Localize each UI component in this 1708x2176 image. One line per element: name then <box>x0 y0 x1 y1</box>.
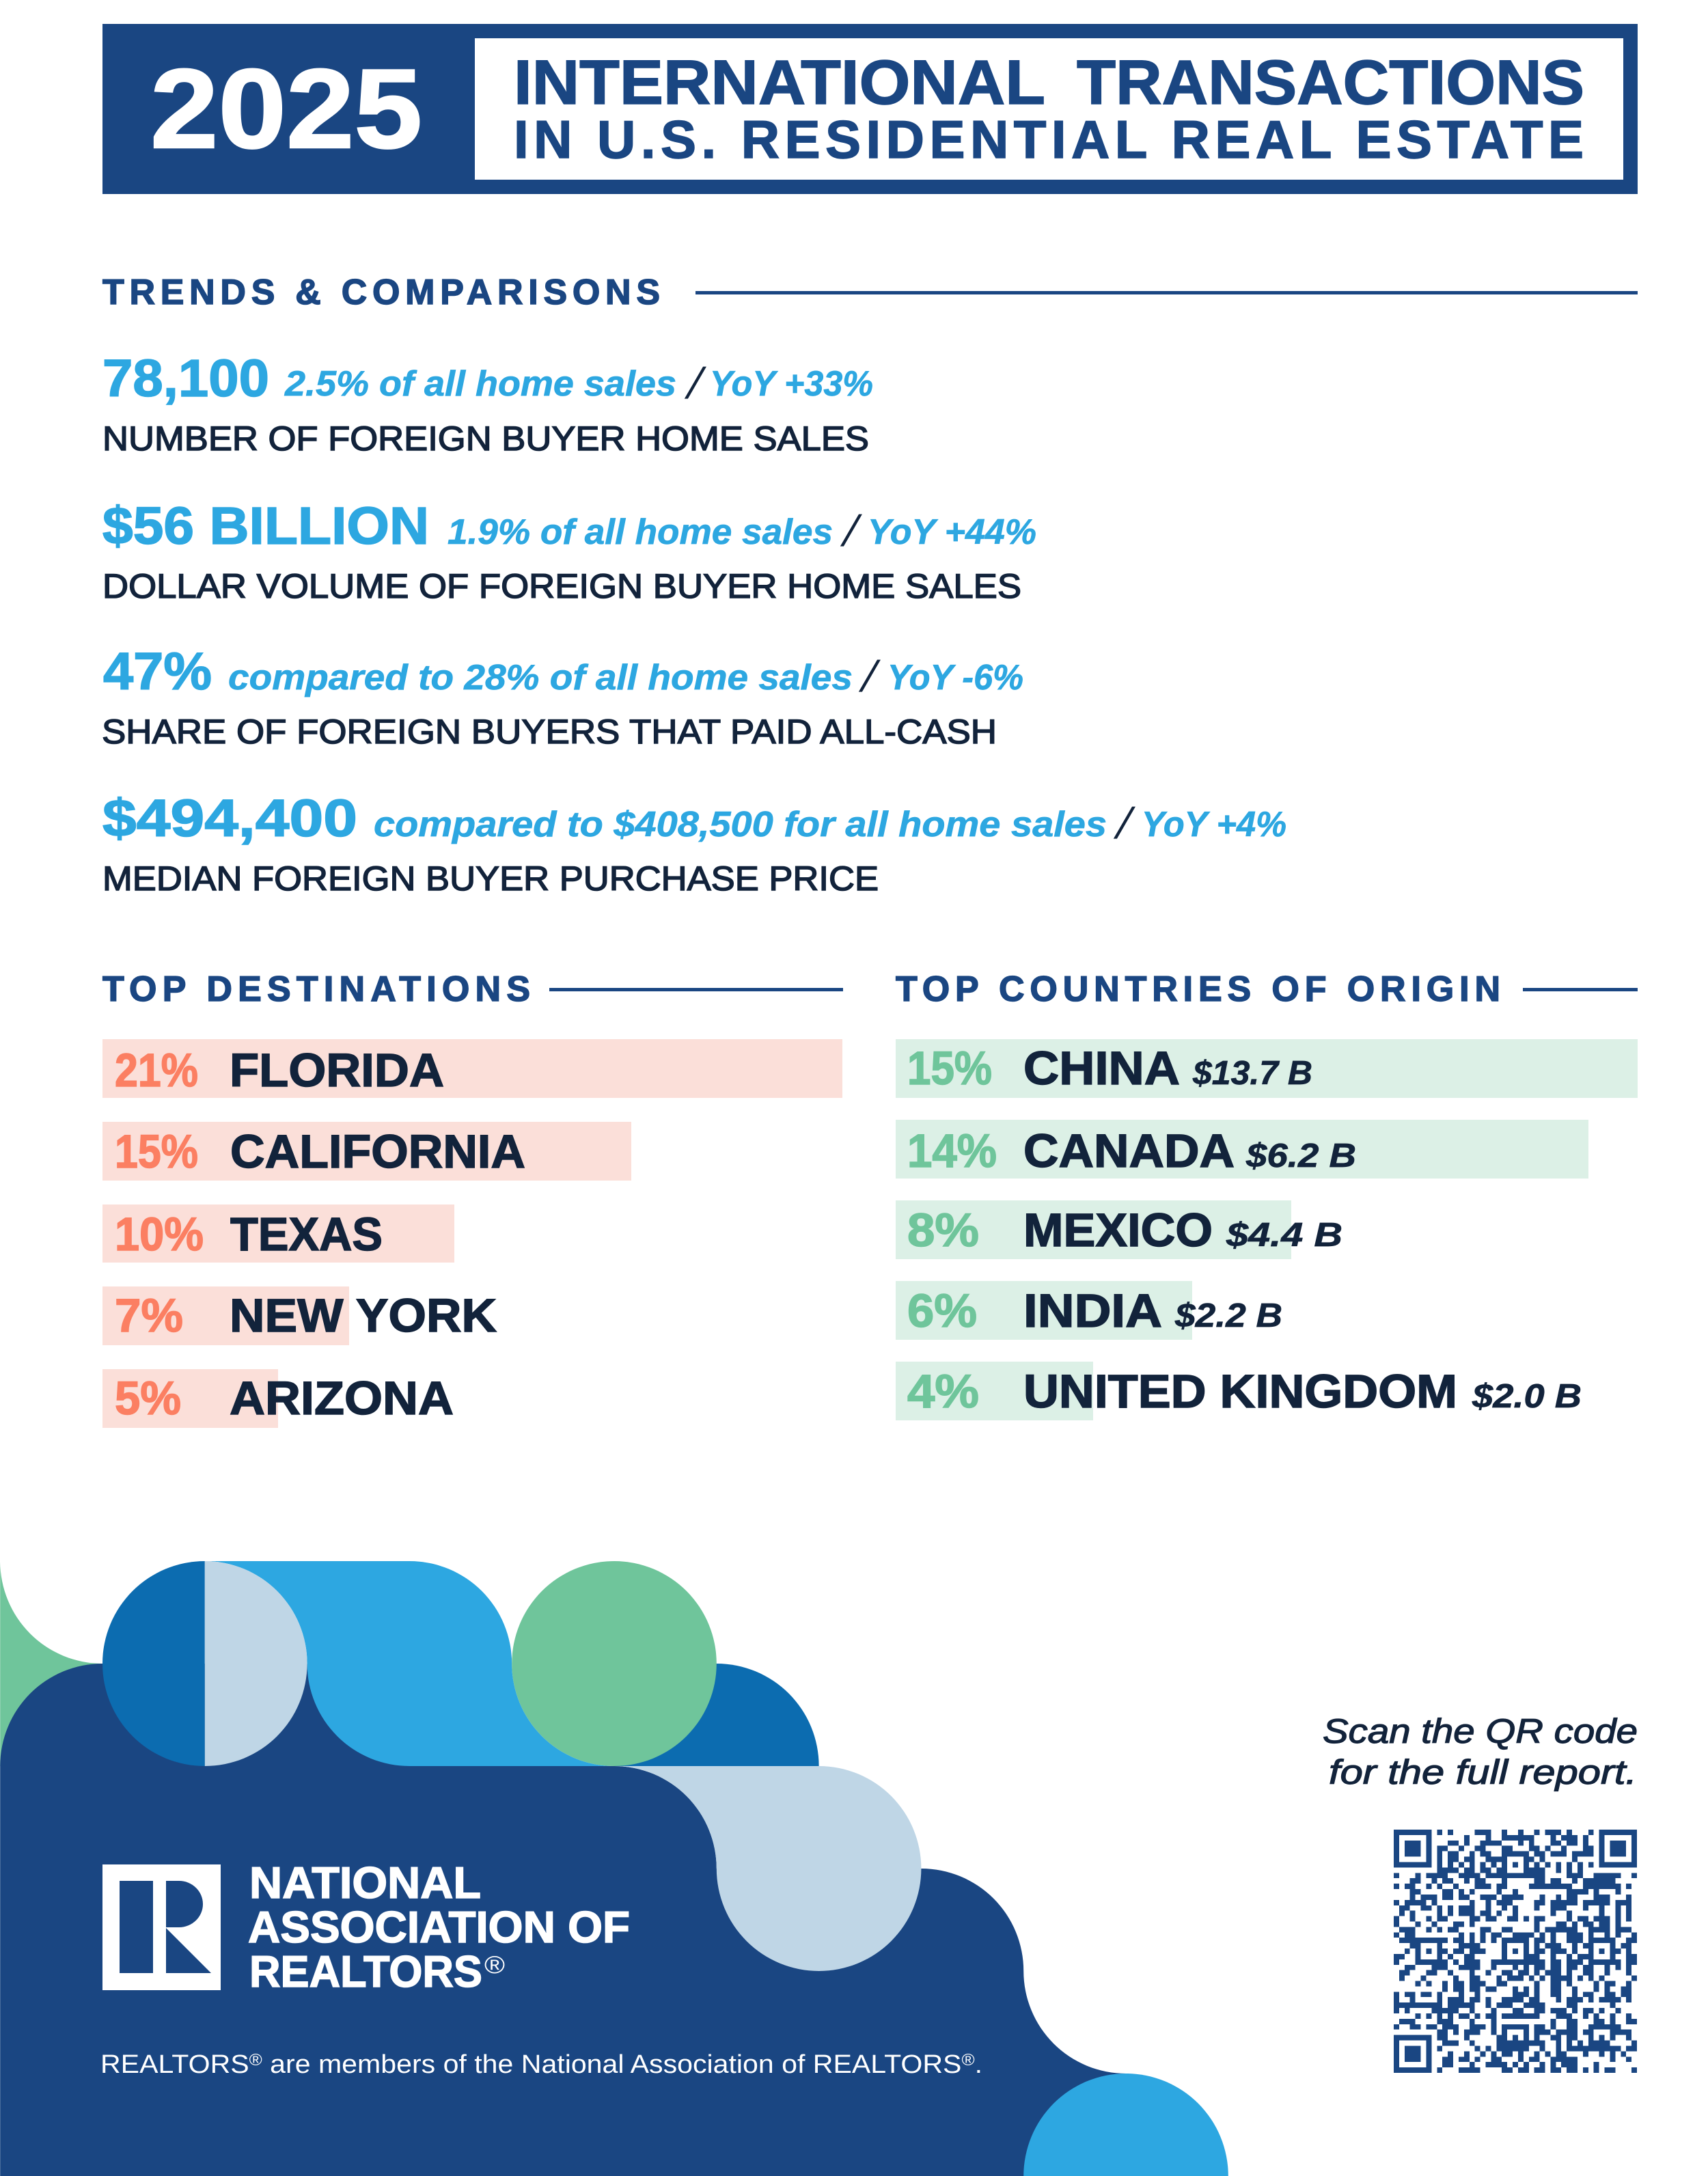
section heading: top destinations: TOP DESTINATIONS <box>102 969 530 1009</box>
QR code <box>1394 1830 1637 2073</box>
logo wordmark: REALTORS <box>249 1946 482 1996</box>
header banner <box>102 24 1638 194</box>
bar chart: top countries of origin <box>896 1039 1638 1420</box>
stat: median purchase price: compared to $408,500 for all home sales <box>374 805 1107 844</box>
bar: Florida: FLORIDA <box>230 1044 444 1097</box>
section heading: trends and comparisons <box>102 273 1638 312</box>
footer note: . <box>975 2050 982 2079</box>
stat: median purchase price: MEDIAN FOREIGN BUYER PURCHASE PRICE <box>102 859 879 898</box>
bar: India: INDIA <box>1023 1284 1162 1337</box>
stat: all-cash share: SHARE OF FOREIGN BUYERS THAT PAID ALL-CASH <box>102 713 997 751</box>
decorative footer shapes <box>0 1561 1228 2176</box>
logo wordmark: ® <box>484 1951 505 1979</box>
footer note: ® <box>961 2051 975 2069</box>
bar: Texas <box>102 1204 454 1263</box>
logo wordmark <box>248 1858 630 1996</box>
footer note: ® <box>249 2051 262 2069</box>
bar: Florida <box>102 1039 842 1098</box>
bar: China: 15% <box>907 1042 992 1094</box>
logo wordmark: ASSOCIATION OF <box>248 1902 630 1952</box>
stat: foreign buyer home sales: 2.5% of all home sales <box>284 364 676 404</box>
bar: New York: 7% <box>115 1289 183 1342</box>
stat: median purchase price: / <box>1111 799 1138 848</box>
stat: all-cash share <box>102 642 1023 751</box>
bar: India: 6% <box>907 1284 977 1337</box>
bar: United Kingdom: 4% <box>907 1365 979 1418</box>
bar: Mexico: $4.4 B <box>1226 1217 1342 1254</box>
footer note: REALTORS <box>100 2050 238 2079</box>
bar: Canada: 14% <box>907 1125 997 1177</box>
bar: India <box>896 1281 1282 1340</box>
year: 2025 <box>150 46 422 171</box>
bar: California <box>102 1122 631 1181</box>
bar: Arizona <box>102 1369 454 1428</box>
bar: Mexico: 8% <box>907 1204 979 1256</box>
section heading: top countries of origin: TOP COUNTRIES OF ORIGIN <box>896 969 1500 1009</box>
stat: foreign buyer home sales: YoY +33% <box>710 364 873 404</box>
footer note: are members of the National Association of REALTORS <box>262 2050 961 2079</box>
bar: China: $13.7 B <box>1192 1055 1312 1092</box>
bar: Mexico: MEXICO <box>1023 1204 1213 1256</box>
bar: New York <box>102 1286 497 1345</box>
stat: all-cash share: 47% <box>103 642 212 701</box>
bar: United Kingdom <box>896 1362 1582 1420</box>
bar: China <box>896 1039 1638 1098</box>
title: TRANSACTIONS <box>1077 48 1584 118</box>
stat: foreign buyer home sales: / <box>682 359 709 408</box>
section heading: top destinations <box>102 969 843 1009</box>
bar: United Kingdom: $2.0 B <box>1472 1378 1582 1415</box>
bar: Texas: TEXAS <box>230 1208 383 1261</box>
bar: New York: NEW YORK <box>230 1289 497 1342</box>
stat: dollar volume: YoY +44% <box>868 512 1036 552</box>
bar: Arizona: 5% <box>115 1372 181 1424</box>
stat: foreign buyer home sales: NUMBER OF FOREIGN BUYER HOME SALES <box>102 419 869 458</box>
section heading: trends and comparisons: TRENDS & COMPARISONS <box>102 273 660 312</box>
stat: median purchase price: $494,400 <box>102 789 357 848</box>
bar: Texas: 10% <box>115 1208 204 1261</box>
stat: all-cash share: YoY -6% <box>887 658 1023 698</box>
title <box>514 48 1584 169</box>
QR prompt: for the full report. <box>1329 1753 1637 1791</box>
bar: Mexico <box>896 1200 1342 1259</box>
bar: United Kingdom: UNITED KINGDOM <box>1023 1365 1457 1418</box>
bar: China: CHINA <box>1023 1042 1180 1094</box>
stat: all-cash share: compared to 28% of all home sales <box>228 658 853 698</box>
bar chart: top destinations <box>102 1039 842 1428</box>
bar: Canada: CANADA <box>1023 1125 1235 1177</box>
title: INTERNATIONAL <box>514 48 1045 118</box>
bar: India: $2.2 B <box>1174 1297 1282 1334</box>
stat: median purchase price: YoY +4% <box>1142 805 1286 844</box>
stat: foreign buyer home sales: 78,100 <box>102 349 269 408</box>
stat: dollar volume: DOLLAR VOLUME OF FOREIGN BUYER HOME SALES <box>102 567 1021 605</box>
bar: California: CALIFORNIA <box>230 1125 525 1178</box>
QR prompt: Scan the QR code <box>1323 1712 1638 1750</box>
bar: Canada <box>896 1120 1588 1179</box>
logo: National Association of REALTORS <box>102 1858 630 1996</box>
title: IN U.S. RESIDENTIAL REAL ESTATE <box>514 109 1584 169</box>
logo wordmark: NATIONAL <box>249 1858 481 1908</box>
bar: Arizona: ARIZONA <box>230 1372 454 1424</box>
QR prompt <box>1323 1712 1638 1791</box>
bar: Florida: 21% <box>115 1044 198 1097</box>
bar: Canada: $6.2 B <box>1245 1138 1356 1174</box>
stat: dollar volume: 1.9% of all home sales <box>447 512 833 552</box>
icon: block R <box>102 1864 221 1990</box>
stat: median purchase price <box>102 789 1286 898</box>
bar: California: 15% <box>115 1125 198 1178</box>
stat: foreign buyer home sales <box>102 349 873 458</box>
stat: dollar volume: $56 BILLION <box>102 497 429 555</box>
stat: dollar volume <box>102 497 1036 605</box>
stat: all-cash share: / <box>856 652 883 701</box>
stat: dollar volume: / <box>838 506 865 555</box>
